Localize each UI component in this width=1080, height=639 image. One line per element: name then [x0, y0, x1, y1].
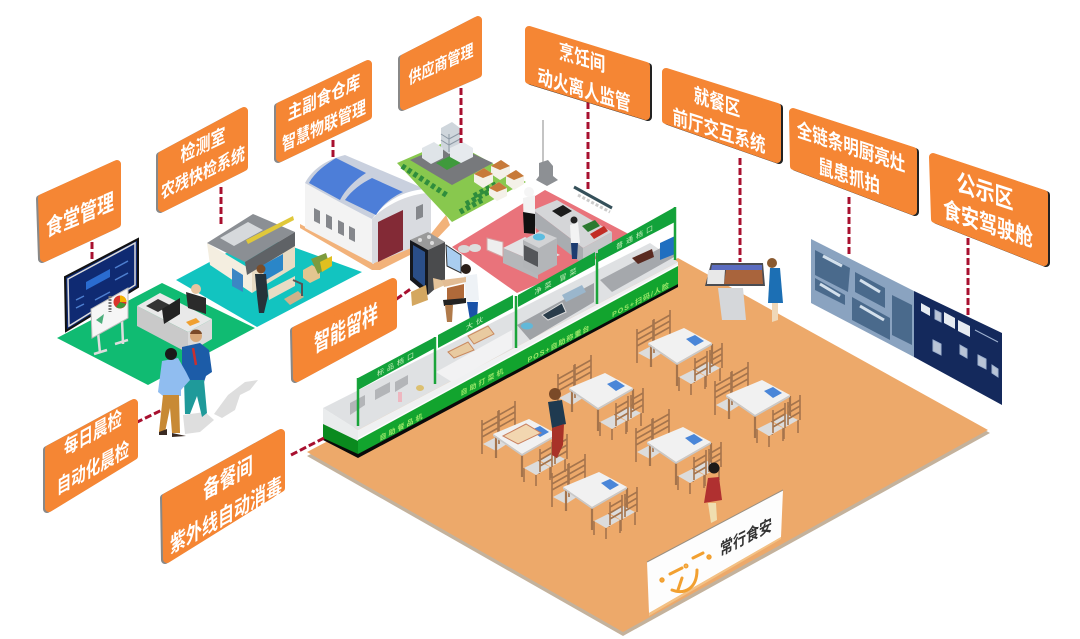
warehouse door — [378, 210, 403, 262]
man in blue suit — [182, 330, 212, 417]
label: lab: 农残快检系统 — [161, 142, 245, 203]
label: lab — [160, 111, 245, 209]
dining tables — [482, 310, 800, 539]
icon: big data monitor — [65, 239, 138, 331]
counter posts — [358, 207, 675, 426]
label: warehouse — [278, 64, 368, 159]
label: prep room: 紫外线自动消毒 — [170, 472, 282, 559]
label: morning check — [47, 403, 134, 509]
food safety dashboard wall — [914, 291, 1002, 405]
man in light blue — [158, 348, 190, 437]
warehouse base — [300, 215, 450, 270]
kitchen floor — [452, 190, 640, 293]
label: supplier — [402, 20, 478, 107]
person in suit — [255, 264, 268, 313]
label: warehouse: 主副食仓库 — [288, 70, 360, 125]
icon: whiteboard with pie chart — [91, 288, 128, 354]
sign: clean dish — [518, 252, 595, 307]
sign: big pot — [438, 295, 513, 348]
label: supplier: 供应商管理 — [409, 39, 474, 89]
management room green floor — [57, 283, 255, 385]
label: prep room — [164, 433, 282, 560]
label: public display — [933, 157, 1046, 263]
counter front labels: POS+自助称重台 — [528, 322, 590, 365]
label: warehouse: 智慧物联管理 — [282, 95, 366, 156]
supplier village — [397, 122, 526, 222]
table 4 — [636, 409, 721, 494]
table 3 — [715, 362, 800, 447]
lab teal floor — [176, 235, 362, 327]
counter black base — [323, 283, 678, 458]
warehouse — [300, 155, 450, 270]
label: public display: 公示区 — [957, 169, 1013, 215]
kitchen counters — [458, 200, 612, 279]
chef left — [523, 187, 536, 234]
label: lab: 检测室 — [181, 123, 225, 167]
label: smart sampling: 智能留样 — [314, 299, 378, 359]
label: dining area: 就餐区 — [694, 83, 740, 121]
sign: standard stall: 标品档口 — [377, 348, 417, 378]
label: bright kitchen — [793, 112, 915, 212]
label: bright kitchen: 鼠患抓拍 — [818, 154, 880, 198]
label: morning check: 自动化晨检 — [57, 436, 130, 499]
label: dining area: 前厅交互系统 — [673, 104, 765, 157]
tray on table — [503, 424, 541, 444]
label: morning check: 每日晨检 — [64, 405, 122, 460]
label: public display: 食安驾驶舱 — [943, 195, 1034, 253]
label: dining area — [666, 72, 779, 160]
woman in blue at kiosk — [767, 258, 783, 322]
counter green front — [358, 266, 678, 454]
counter front labels: 自助餐品机 — [380, 410, 424, 443]
counter front labels: POS+扫码/人脸 — [612, 279, 670, 319]
chef right — [570, 216, 580, 259]
brand name: 常行食安 — [720, 514, 772, 560]
visitor shadow — [183, 380, 258, 434]
label: canteen management: 食堂管理 — [46, 188, 114, 243]
antenna device — [536, 120, 558, 186]
sign: big pot: 大伙 — [466, 312, 486, 332]
sample retention cabinet — [410, 232, 461, 306]
utensil shelf — [574, 187, 612, 212]
label: cooking room: 动火离人监管 — [538, 64, 630, 115]
label: cooking room: 烹饪间 — [559, 39, 605, 76]
table 1 — [637, 310, 722, 395]
two men: morning check — [158, 330, 212, 437]
management desk with person — [137, 284, 212, 353]
label: smart sampling — [294, 282, 393, 379]
woman in red dress — [704, 462, 722, 523]
leader lines — [92, 88, 968, 455]
sign: normal stall — [598, 207, 675, 262]
interactive kiosk — [705, 263, 765, 320]
canteen floor — [307, 258, 990, 636]
brand sign — [647, 490, 783, 616]
label: canteen management — [40, 164, 117, 259]
sign: clean dish: 净菜 冒菜 — [535, 264, 579, 297]
video monitoring wall — [811, 239, 914, 357]
counter front labels: 自助打菜机 — [461, 365, 505, 398]
staff person with sample tray — [442, 264, 479, 322]
label: prep room: 备餐间 — [203, 452, 253, 505]
woman with tray — [548, 388, 566, 458]
sign: standard stall — [358, 337, 435, 390]
table 5 — [552, 454, 637, 539]
serving counter — [323, 207, 678, 458]
counter front labels — [380, 279, 670, 443]
lab building — [207, 214, 332, 313]
counter top — [323, 243, 678, 430]
label: bright kitchen: 全链条明厨亮灶 — [797, 117, 905, 176]
brand logo — [661, 553, 710, 592]
label: cooking room — [529, 30, 648, 117]
table 6 — [482, 401, 567, 486]
sign: normal stall: 普通档口 — [616, 221, 656, 251]
crates and forklift — [284, 253, 332, 305]
table 2 — [558, 355, 643, 440]
counter compartments — [350, 236, 676, 415]
